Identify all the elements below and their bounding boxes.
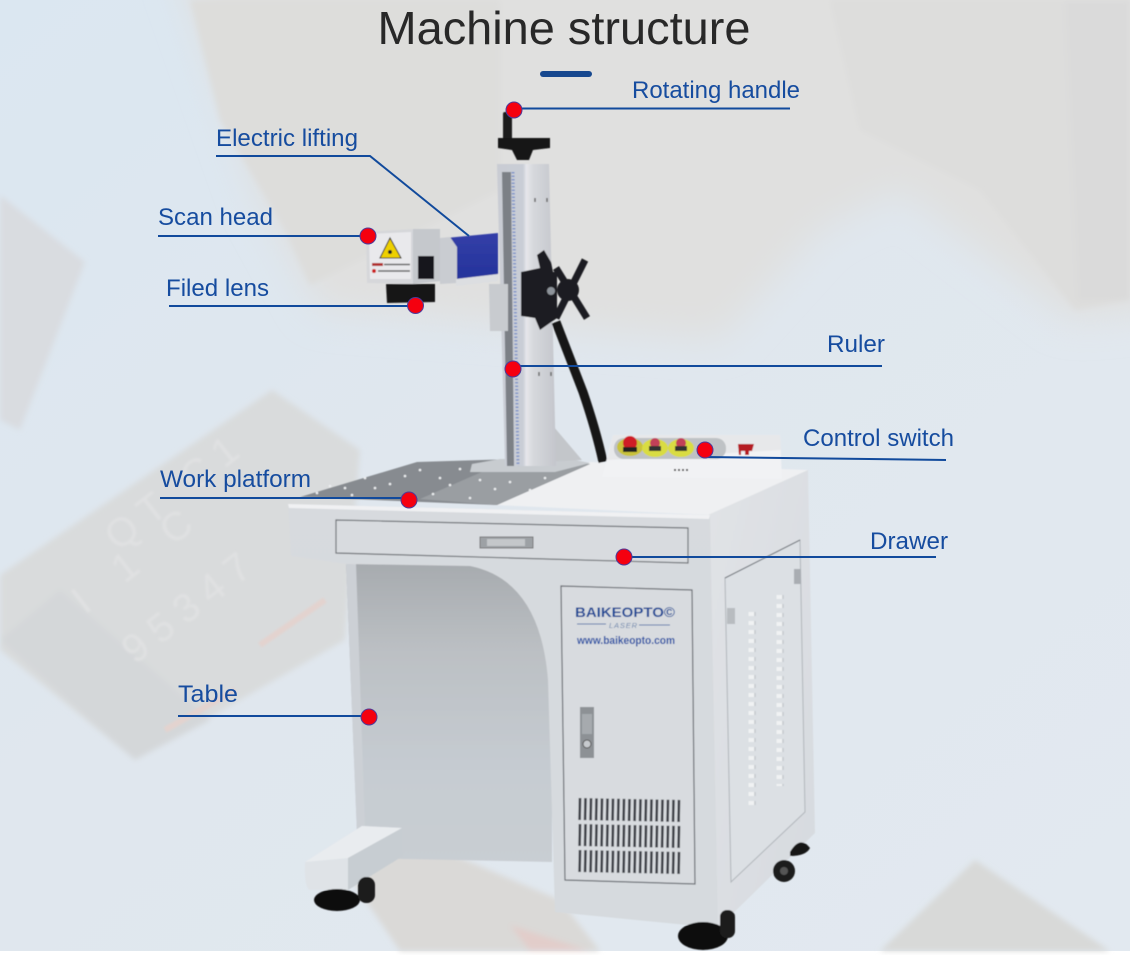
callout: Control switch — [697, 425, 954, 460]
column — [497, 164, 556, 466]
title accent bar — [540, 71, 592, 77]
cabinet door — [561, 586, 695, 884]
callout: Drawer — [616, 528, 948, 565]
machine — [288, 112, 815, 950]
callout: Scan head: Scan head — [158, 204, 273, 231]
callout: Work platform — [160, 466, 417, 508]
callout: Filed lens: Filed lens — [166, 275, 269, 302]
callout: Work platform: Work platform — [160, 466, 311, 493]
table: cabinet front and drawer band — [288, 504, 718, 928]
right casters — [678, 842, 810, 950]
vents — [578, 809, 682, 863]
field lens — [386, 284, 435, 303]
work platform — [300, 459, 590, 505]
callout: Ruler: Ruler — [827, 331, 885, 358]
cable — [556, 322, 603, 462]
callout: Control switch: Control switch — [803, 425, 954, 452]
table: cabinet side — [708, 470, 815, 928]
table: knee panel — [346, 563, 552, 862]
callout: Rotating handle — [506, 77, 800, 118]
rotating handle — [498, 112, 550, 160]
callout: Table — [178, 681, 377, 725]
lower bracket — [489, 284, 508, 331]
background: blurred laser marked chips: QT C1 — [96, 422, 255, 559]
callout: Ruler — [505, 331, 885, 377]
cabinet door: www.baikeopto.com — [576, 635, 675, 647]
drawer — [336, 520, 688, 563]
callout: Electric lifting: Electric lifting — [216, 125, 358, 152]
callout: Drawer: Drawer — [870, 528, 948, 555]
logo: BAIKEOPTO© — [575, 605, 675, 620]
title: Machine structure — [378, 2, 750, 54]
table: work surface top — [495, 462, 808, 515]
scan head — [366, 229, 440, 284]
control box — [602, 435, 782, 479]
callout: Rotating handle: Rotating handle — [632, 77, 800, 104]
callout: Table: Table — [178, 681, 238, 708]
lock — [580, 707, 594, 758]
callout: Filed lens — [166, 275, 424, 314]
background: blurred laser marked chips: I 1 C — [63, 492, 212, 622]
column base — [470, 459, 590, 472]
side door — [725, 540, 805, 882]
background: blurred laser marked chips: 95347 — [113, 538, 268, 672]
column mount and star knob — [521, 250, 587, 330]
blue arm: electric lifting — [446, 233, 498, 283]
callout: Electric lifting — [216, 125, 469, 236]
foot — [305, 826, 403, 911]
callout: Scan head — [158, 204, 376, 244]
cabinet door: LASER — [609, 621, 638, 630]
